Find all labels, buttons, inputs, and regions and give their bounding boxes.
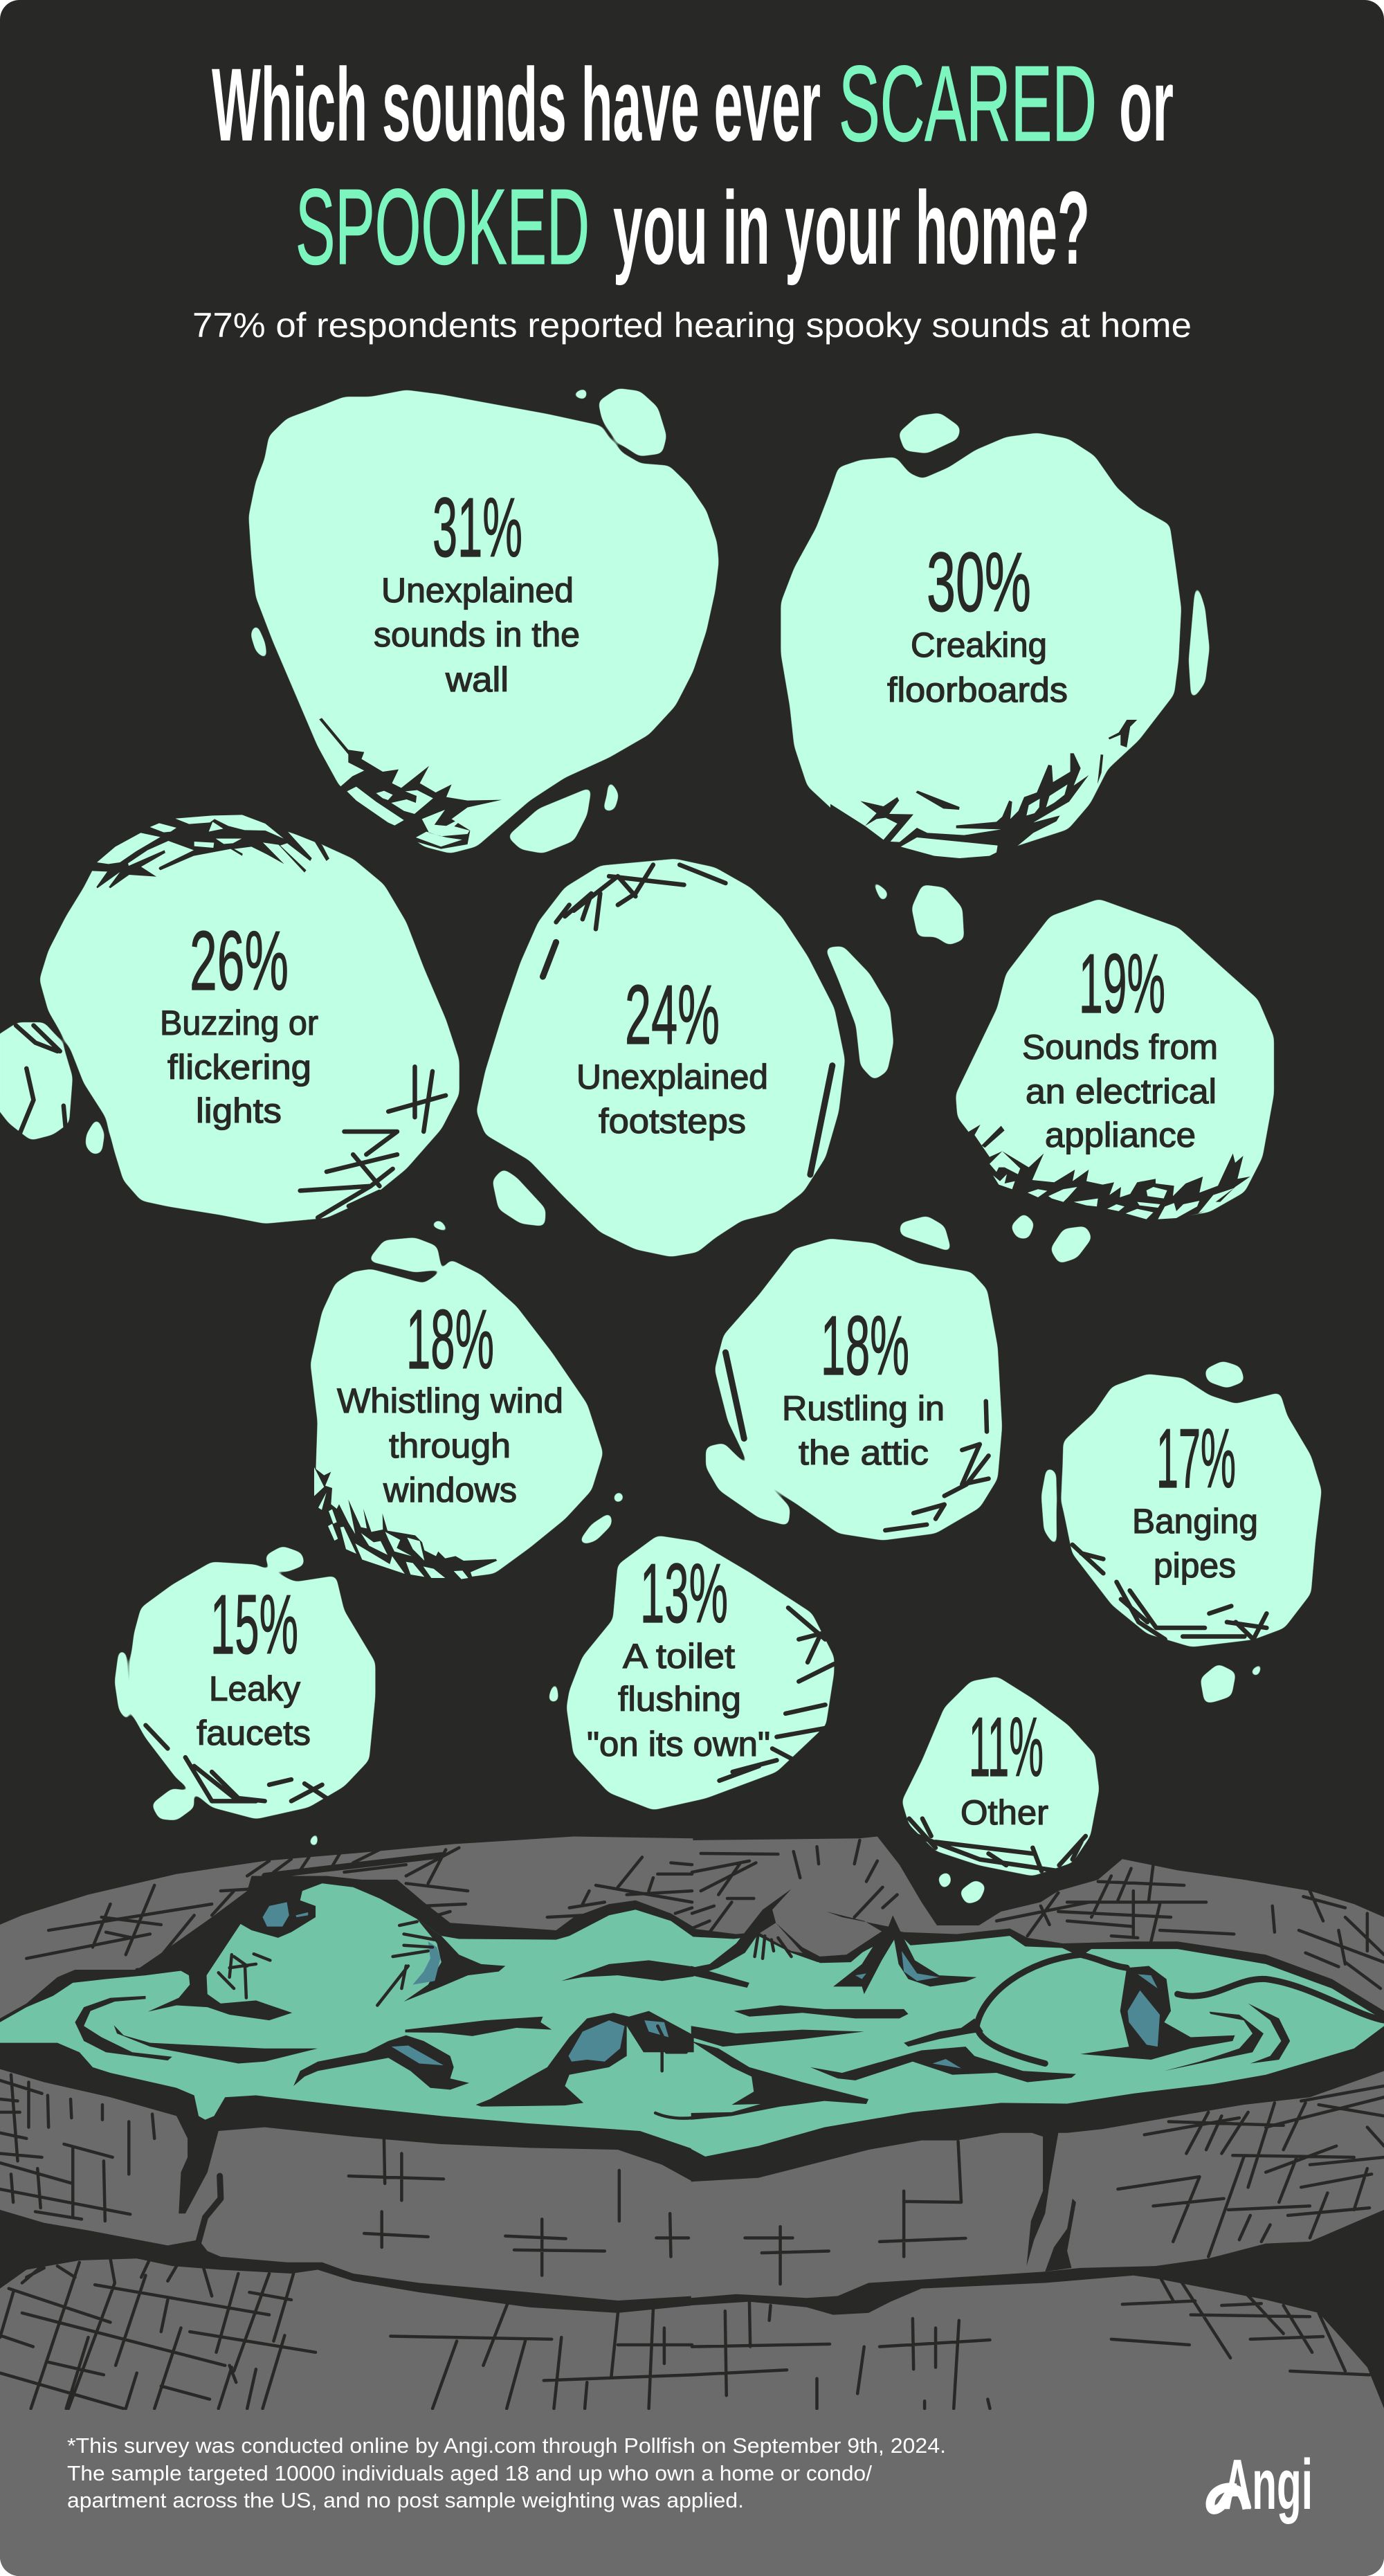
bubble: 18% whistling wind through windows: Whistling wind — [337, 1381, 563, 1420]
title: SCARED — [839, 44, 1097, 163]
stone walls with hatch marks — [0, 1837, 1384, 2427]
footnote: apartment across the US, and no post sample weighting was applied. — [67, 2488, 744, 2512]
bubble: 15% leaky faucets: 15% — [210, 1577, 298, 1671]
bubble: 31% unexplained sounds in the wall: 31% — [432, 480, 522, 574]
bubble: 30% creaking floorboards — [781, 413, 1209, 863]
bubble: 26% buzzing or flickering lights: lights — [196, 1091, 282, 1130]
subtitle: 77% of respondents reported hearing spooky sounds at home — [192, 306, 1192, 345]
bubble: 19% sounds from an electrical appliance: an electrical — [1026, 1072, 1217, 1111]
bubble: 26% buzzing or flickering lights — [0, 810, 459, 1224]
bubble: 31% unexplained sounds in the wall: sounds in the — [374, 615, 580, 654]
bubble: 18% whistling wind through windows: windows — [383, 1471, 517, 1509]
title: SPOOKED — [295, 167, 590, 287]
bubble: 19% sounds from an electrical appliance: 19% — [1079, 936, 1165, 1031]
bubble: 31% unexplained sounds in the wall: wall — [445, 660, 509, 699]
bubble: 30% creaking floorboards: floorboards — [887, 671, 1068, 709]
logo: Angi — [1210, 2445, 1313, 2524]
bubble: 11% other — [902, 1677, 1099, 1905]
bubble: 13% a toilet flushing on its own — [548, 1536, 834, 1810]
bubble: 24% unexplained footsteps: footsteps — [599, 1102, 746, 1141]
bubble: 30% creaking floorboards: 30% — [927, 535, 1031, 629]
bubble: 26% buzzing or flickering lights: flickering — [167, 1048, 311, 1087]
footnote: The sample targeted 10000 individuals aged 18 and up who own a home or condo/ — [67, 2461, 872, 2485]
bubble: 26% buzzing or flickering lights: Buzzing or — [160, 1004, 318, 1042]
bubble: 15% leaky faucets: Leaky — [209, 1669, 300, 1708]
dark recess around the pool — [0, 1876, 1384, 2271]
mounds, ripples and blue shadows — [75, 1889, 1384, 2120]
bubble: 13% a toilet flushing on its own: A toilet — [623, 1637, 735, 1676]
bubble: 18% rustling in the attic: 18% — [821, 1298, 909, 1393]
title — [212, 44, 1174, 287]
footer panel — [0, 2410, 1384, 2576]
logo: Angi: Angi — [1223, 2445, 1313, 2524]
bubble: 19% sounds from an electrical appliance — [956, 899, 1274, 1264]
bubble: 13% a toilet flushing on its own: flushing — [618, 1680, 741, 1718]
bubble: 13% a toilet flushing on its own: "on its own" — [587, 1725, 770, 1763]
bubble: 31% unexplained sounds in the wall — [249, 388, 718, 853]
bubble: 19% sounds from an electrical appliance: appliance — [1045, 1116, 1196, 1154]
bubble: 31% unexplained sounds in the wall: Unexplained — [381, 571, 574, 610]
bubble: 11% other: 11% — [969, 1700, 1044, 1794]
bubble: 30% creaking floorboards: Creaking — [911, 626, 1047, 664]
bubble: 24% unexplained footsteps: Unexplained — [576, 1058, 768, 1096]
illustration: cauldron of green liquid — [0, 1837, 1384, 2427]
bubble: 18% whistling wind through windows: through — [389, 1426, 511, 1465]
bubble: 17% banging pipes: 17% — [1156, 1411, 1236, 1505]
bubble: 26% buzzing or flickering lights: 26% — [190, 914, 289, 1008]
footnote — [67, 2433, 946, 2512]
bubble: 24% unexplained footsteps — [477, 859, 964, 1257]
bubble: 17% banging pipes: Banging — [1132, 1502, 1258, 1541]
bubble: 18% rustling in the attic: Rustling in — [782, 1389, 945, 1428]
bubble: 18% rustling in the attic: the attic — [799, 1433, 929, 1472]
bubble: 19% sounds from an electrical appliance: Sounds from — [1022, 1028, 1218, 1067]
bubble: 18% whistling wind through windows — [311, 1219, 625, 1592]
bubble: 17% banging pipes: pipes — [1154, 1546, 1236, 1585]
footnote: *This survey was conducted online by Angi.com through Pollfish on September 9th, 2024. — [67, 2433, 946, 2458]
bubble: 18% whistling wind through windows: 18% — [406, 1292, 494, 1386]
title: or — [1119, 46, 1174, 163]
bubble: 18% rustling in the attic — [706, 1216, 1002, 1540]
bubble: 11% other: Other — [960, 1793, 1048, 1832]
bubble: 15% leaky faucets — [115, 1546, 375, 1848]
bubble: 13% a toilet flushing on its own: 13% — [640, 1546, 728, 1640]
green liquid — [0, 1883, 1384, 2157]
bubble: 15% leaky faucets: faucets — [197, 1714, 311, 1752]
bubble: 17% banging pipes — [1041, 1361, 1321, 1703]
bubble: 24% unexplained footsteps: 24% — [625, 968, 720, 1062]
